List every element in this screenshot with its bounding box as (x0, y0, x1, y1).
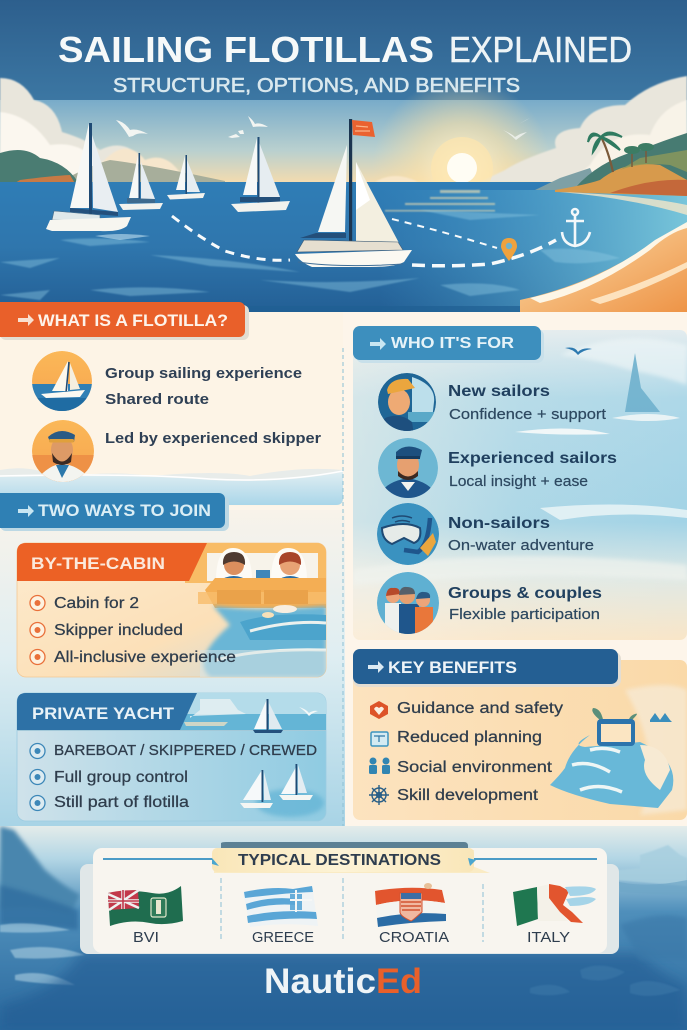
text: groups and couples: Groups & couples (448, 585, 602, 602)
panel: key benefits (353, 649, 687, 820)
flag: Italy with map (513, 884, 596, 926)
clouds right (375, 76, 687, 182)
banner: two ways to join: TWO WAYS TO JOIN (38, 502, 211, 520)
text: groups and couples (448, 585, 602, 623)
clouds left (0, 78, 185, 182)
sun reflection (385, 190, 495, 212)
illustration: yacht scene (17, 693, 326, 817)
panel: typical destinations (80, 842, 619, 954)
list: by-the-cabin (30, 595, 236, 666)
logo: NauticEd: Ed (376, 962, 422, 1001)
banner: key benefits: KEY BENEFITS (388, 659, 517, 677)
hero bottom edge (414, 306, 520, 312)
main boat (295, 119, 412, 267)
header: private yacht: PRIVATE YACHT (32, 705, 174, 723)
text: experienced sailors (448, 450, 617, 490)
banner: key benefits (353, 649, 621, 687)
banner: two ways to join (0, 493, 229, 531)
anchor (562, 209, 590, 246)
boat 3 (167, 155, 205, 200)
header: private yacht (17, 693, 197, 730)
header strips (103, 858, 220, 860)
waves (0, 210, 620, 300)
text: planning: Reduced planning (397, 729, 542, 746)
text: new sailors: Confidence + support (449, 407, 606, 423)
icon: new sailor (378, 373, 436, 431)
illustration: luggage and coastline (550, 685, 687, 815)
sea (0, 182, 687, 312)
list: private yacht: Full group control (54, 769, 188, 786)
text: guidance: Guidance and safety (397, 700, 563, 717)
sun (432, 137, 493, 182)
banner: what is a flotilla (0, 302, 249, 340)
header: by-the-cabin (17, 543, 207, 581)
subtitle: STRUCTURE, OPTIONS, AND BENEFITS (113, 75, 520, 97)
list: by-the-cabin: Skipper included (54, 622, 183, 639)
text: non-sailors (448, 515, 594, 554)
panel: private yacht (17, 693, 326, 821)
list: by-the-cabin: All-inclusive experience (54, 649, 236, 666)
text: non-sailors: On-water adventure (448, 538, 594, 554)
icon: ship wheel (369, 785, 389, 805)
left island (0, 150, 225, 182)
logo: NauticEd (264, 962, 422, 1001)
text: non-sailors: Non-sailors (448, 515, 550, 532)
text: experienced sailors: Experienced sailors (448, 450, 617, 467)
title (58, 29, 632, 70)
icon: experienced sailor (378, 438, 438, 500)
label: Croatia: CROATIA (379, 930, 449, 946)
text: social: Social environment (397, 759, 553, 776)
list: by-the-cabin: Cabin for 2 (54, 595, 139, 612)
banner: who it's for (353, 326, 544, 363)
icon: snorkel mask (377, 503, 439, 565)
icon: shield heart (370, 701, 388, 719)
banner: who it's for: WHO IT'S FOR (391, 335, 514, 352)
text: new sailors: New sailors (448, 383, 550, 400)
text: groups and couples: Flexible participation (449, 607, 600, 623)
illustration: distant sailboat and waves (353, 338, 687, 585)
icon: planning board (371, 732, 388, 746)
panel: who it's for (353, 326, 687, 640)
beach (520, 192, 687, 312)
label: Greece: GREECE (252, 930, 314, 946)
right island (535, 132, 687, 196)
list: private yacht: BAREBOAT / SKIPPERED / CREWED (54, 743, 317, 759)
icon: group of people (377, 572, 439, 637)
title: SAILING FLOTILLAS (58, 29, 434, 70)
hero illustration (0, 0, 687, 312)
flag: BVI (108, 886, 183, 926)
panel: what is a flotilla (0, 302, 343, 506)
boat 2 (119, 153, 163, 210)
background: left column lower (0, 510, 345, 835)
illustration: cabin bed (185, 543, 326, 677)
text: flotilla line 3: Led by experienced skipper (105, 430, 321, 447)
icon: people (369, 758, 390, 774)
icon: sailboat circle (32, 351, 92, 411)
bottom seascape (0, 826, 687, 1030)
gulls (116, 116, 530, 140)
location pin (501, 238, 517, 261)
header: by-the-cabin: BY-THE-CABIN (31, 555, 165, 573)
list: private yacht: Still part of flotilla (54, 794, 189, 811)
logo: NauticEd: Nautic (264, 962, 376, 1001)
label: BVI: BVI (133, 930, 159, 946)
list: private yacht (30, 743, 317, 811)
header tab: TYPICAL DESTINATIONS (238, 852, 441, 869)
boat 4 (231, 137, 290, 212)
boat 1 (46, 123, 150, 240)
label: Italy: ITALY (527, 930, 570, 946)
panel: by-the-cabin (17, 543, 326, 677)
dashed routes (172, 216, 556, 266)
text: flotilla line 2: Shared route (105, 391, 209, 408)
title: EXPLAINED (449, 29, 632, 70)
text: skill: Skill development (397, 787, 539, 804)
header tab (212, 842, 490, 873)
text: experienced sailors: Local insight + ease (449, 474, 588, 490)
flag: Greece (243, 886, 318, 927)
text: flotilla line 1: Group sailing experience (105, 365, 302, 382)
text: new sailors (448, 383, 606, 423)
banner: what is a flotilla: WHAT IS A FLOTILLA? (38, 312, 228, 330)
flag: Croatia (375, 883, 446, 927)
icon: skipper circle (32, 420, 94, 482)
water strip (0, 468, 343, 505)
